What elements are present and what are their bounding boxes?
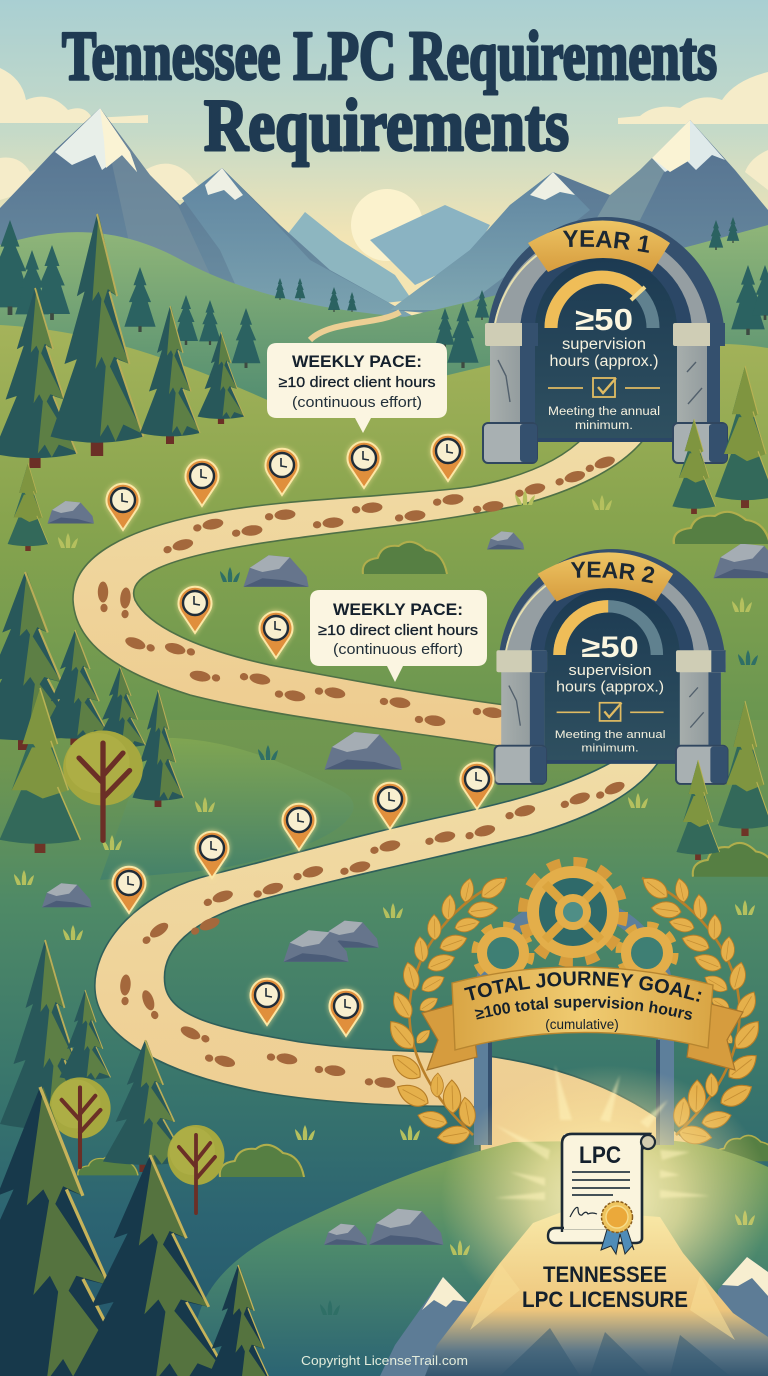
callout: weekly pace year 1: ≥10 direct client hours	[278, 374, 436, 391]
scroll curl	[641, 1135, 655, 1149]
sky background	[0, 0, 768, 330]
dirt trail: year 1 segment	[73, 436, 645, 747]
callout: weekly pace year 2: WEEKLY PACE:	[333, 600, 463, 619]
callout: weekly pace year 2	[310, 590, 487, 682]
destination label: LPC LICENSURE	[522, 1287, 688, 1312]
destination label	[522, 1262, 688, 1312]
light rays	[495, 1065, 710, 1200]
total journey gate frame	[482, 905, 666, 1145]
year 1 note	[548, 406, 660, 432]
year 1 supervision text: hours (approx.)	[550, 353, 658, 370]
year 1 label: YEAR 1	[562, 230, 649, 253]
summit glow	[441, 1065, 768, 1335]
year 2 label: YEAR 2	[570, 562, 654, 584]
callout: weekly pace year 2: ≥10 direct client hours	[318, 622, 478, 639]
year 1 supervision text	[550, 336, 658, 370]
year 2 note: Meeting the annual	[555, 729, 665, 741]
panel: year 1 gate	[482, 217, 728, 464]
footprints: year 1 trail	[98, 454, 616, 727]
distant mountains	[0, 108, 768, 340]
forest: lower left	[0, 940, 224, 1213]
year 1 gauge	[551, 277, 653, 328]
ribbon	[601, 1226, 634, 1254]
clock pins: year 1	[105, 433, 466, 661]
banner hours line: ≥100 total supervision hours	[474, 996, 692, 1020]
small snowy peaks	[380, 1257, 768, 1376]
banner cumulative note: (cumulative)	[545, 1017, 619, 1032]
year 1 hours: ≥50	[575, 302, 633, 337]
callout: weekly pace year 2: (continuous effort)	[333, 641, 463, 658]
certificate scroll	[548, 1134, 655, 1254]
rocks on final hill	[320, 1209, 755, 1315]
gold seal	[602, 1202, 632, 1232]
banner heading: TOTAL JOURNEY GOAL:	[464, 972, 702, 1002]
copyright: Copyright LicenseTrail.com	[301, 1353, 468, 1368]
sun	[351, 189, 423, 261]
destination label: TENNESSEE	[543, 1262, 667, 1287]
footprints: year 2 trail	[118, 779, 626, 1089]
certificate title: LPC	[579, 1142, 621, 1169]
year 2 hours: ≥50	[581, 631, 639, 664]
banner: total journey goal	[421, 966, 744, 1071]
glowing summit mountain	[425, 1210, 768, 1376]
callout: weekly pace year 1: WEEKLY PACE:	[292, 352, 422, 371]
clouds	[0, 68, 768, 200]
final hill with glow	[193, 1140, 768, 1376]
year 1 note: minimum.	[575, 420, 633, 432]
title: Requirements	[204, 85, 569, 167]
year 2 checkbox	[557, 703, 664, 721]
forest: middle left	[0, 572, 184, 853]
callout: weekly pace year 1: (continuous effort)	[292, 394, 422, 411]
gears	[476, 863, 674, 980]
title	[62, 18, 717, 167]
year 2 supervision text	[556, 663, 664, 695]
signature	[570, 1207, 597, 1217]
year 2 note: minimum.	[581, 742, 639, 754]
year 2 gauge	[559, 606, 657, 655]
year 1 note: Meeting the annual	[548, 406, 660, 418]
callout: weekly pace year 1	[267, 343, 447, 433]
year 2 note	[555, 729, 665, 754]
certificate lines	[572, 1172, 630, 1195]
foreground pines	[0, 1087, 278, 1376]
grass tufts	[14, 490, 758, 1140]
year 1 checkbox	[548, 378, 660, 397]
dirt trail: year 2 segment	[95, 760, 720, 1180]
panel: year 2 gate	[494, 549, 728, 785]
background tree line	[0, 217, 768, 368]
year 2 supervision text: hours (approx.)	[556, 679, 664, 695]
clock pins: year 2	[111, 761, 495, 1039]
year 1 supervision text: supervision	[562, 336, 646, 353]
year 2 supervision text: supervision	[569, 663, 652, 679]
pines in front of gates	[672, 366, 768, 860]
laurel wreath	[384, 872, 765, 1147]
forest: upper left	[0, 214, 244, 551]
rocks and bushes	[42, 501, 768, 1177]
